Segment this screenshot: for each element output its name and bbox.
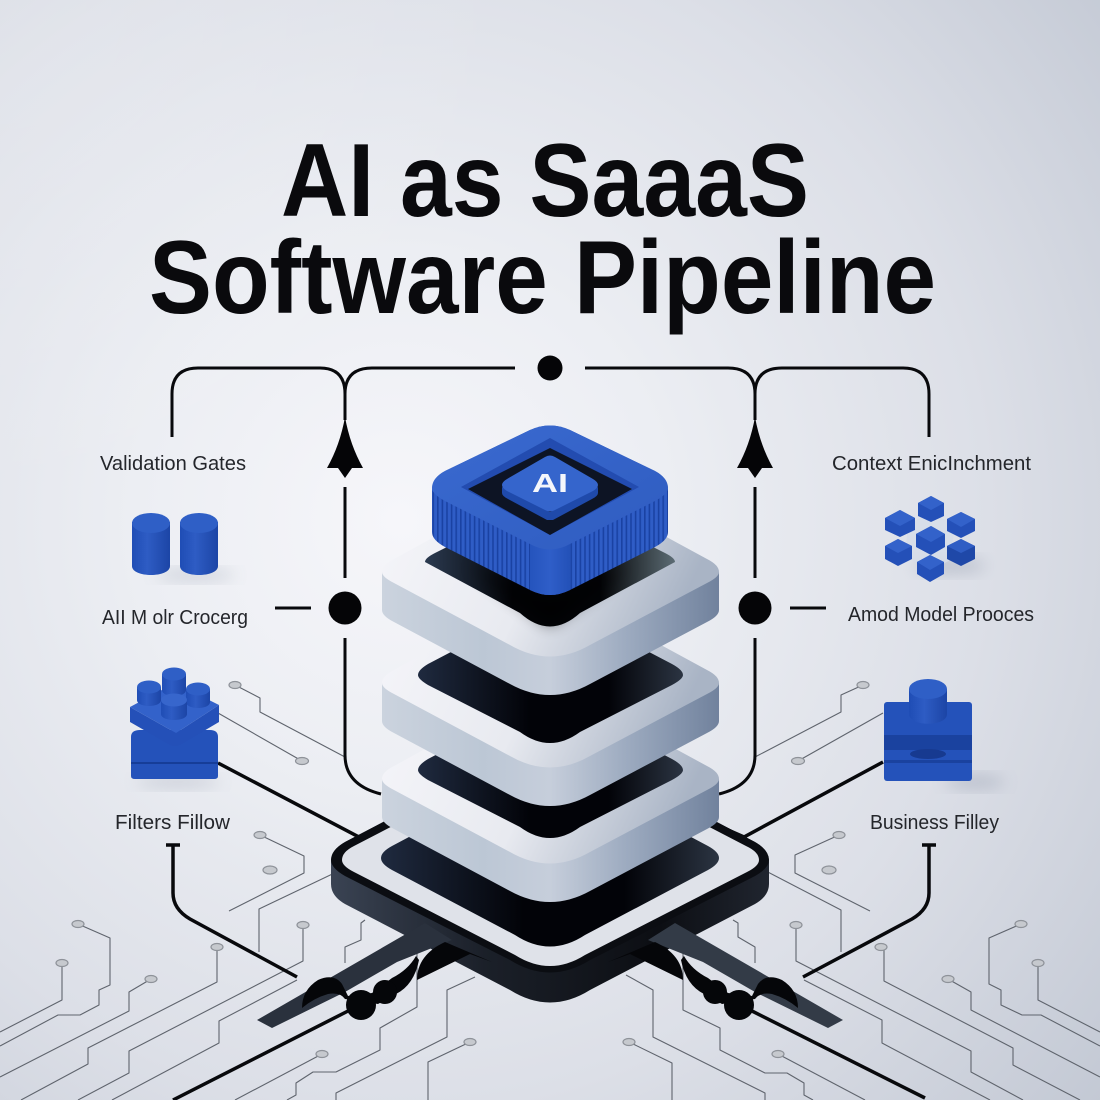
icon: business filter block <box>884 679 1005 788</box>
icon: context cubes <box>885 496 986 582</box>
labels: AII M olr Crocerg <box>102 607 248 629</box>
right ribbon connector <box>608 923 843 1028</box>
stack layer 1 <box>382 482 719 695</box>
title: AI as SaaaS <box>281 123 809 239</box>
left ribbon connector <box>257 923 492 1028</box>
base recess <box>381 766 719 946</box>
labels: Context EnicInchment <box>832 453 1031 475</box>
AI chip <box>432 426 668 595</box>
labels: Amod Model Prooces <box>848 604 1034 626</box>
chip AI tile: AI <box>532 468 568 498</box>
base platform side <box>331 740 769 1002</box>
top bracket connectors <box>172 368 929 437</box>
layer 1 recess <box>425 503 675 626</box>
icon: validation gates cylinders <box>132 513 235 580</box>
labels: Business Filley <box>870 812 999 834</box>
left flow line with arrow and dot <box>275 417 381 794</box>
labels: Filters Fillow <box>115 812 231 834</box>
chip top face <box>432 426 668 550</box>
stack layer 3 <box>382 690 719 902</box>
layer 3 recess <box>418 699 683 838</box>
labels <box>100 453 1034 834</box>
circuit traces: left <box>0 682 476 1100</box>
title <box>149 123 936 336</box>
chip AI tile <box>502 456 598 520</box>
icon: filters stacked block <box>130 668 220 787</box>
right flow line with arrow and dot <box>719 417 826 794</box>
chip opening <box>461 438 639 535</box>
circuit traces: right <box>623 682 1100 1100</box>
layer 2 recess <box>418 604 683 743</box>
labels: Validation Gates <box>100 453 246 475</box>
stack layer 2 <box>382 594 719 806</box>
top hub dot <box>538 356 562 380</box>
title: Software Pipeline <box>149 220 936 336</box>
thick connector lines <box>166 762 936 1100</box>
base platform top <box>331 740 769 972</box>
